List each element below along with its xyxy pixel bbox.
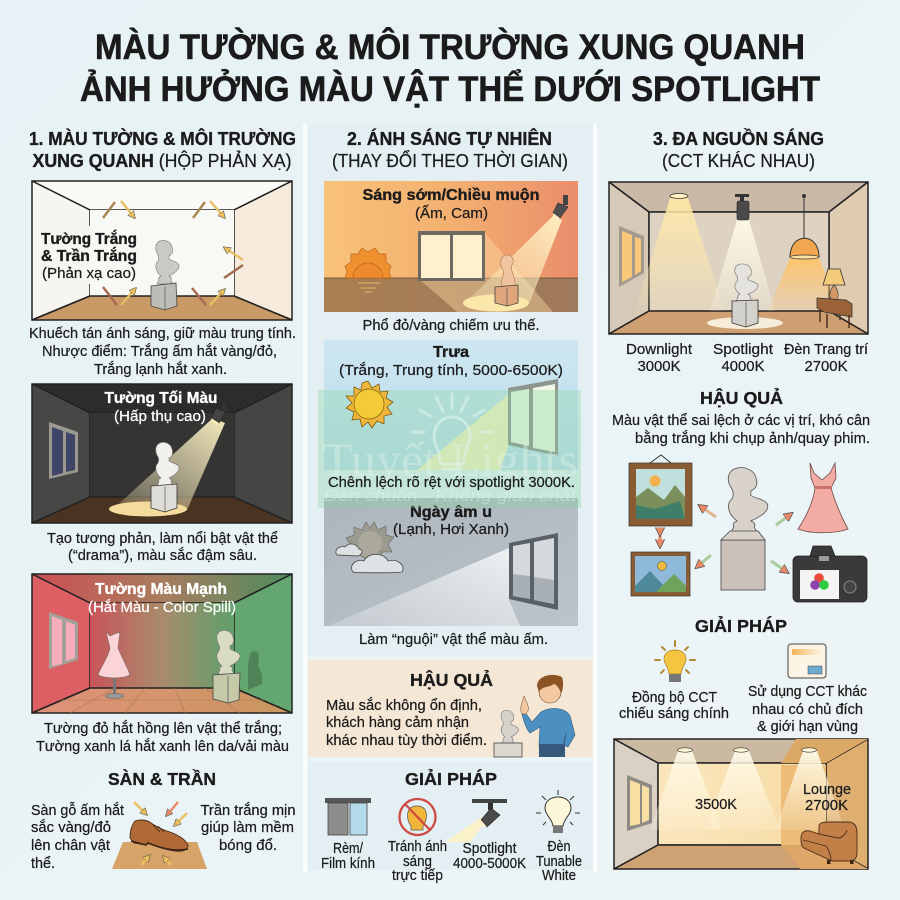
- column divider right: [593, 124, 597, 872]
- scene label: (Ấm, Cam): [415, 205, 488, 222]
- small painting: [631, 552, 690, 596]
- light pool: [707, 317, 783, 329]
- dress on mannequin: [98, 632, 130, 698]
- text: floor: sắc vàng/đỏ: [31, 819, 111, 836]
- title: [80, 27, 820, 109]
- heading: solutions: GIẢI PHÁP: [695, 615, 787, 636]
- camera: [793, 546, 867, 602]
- statue on plinth: [732, 264, 758, 327]
- icon: tunable white bulb: [536, 790, 580, 833]
- heading: column 2: 2. ÁNH SÁNG TỰ NHIÊN: [347, 128, 552, 149]
- zone labels: Lounge: [803, 781, 851, 798]
- labels: sources: Spotlight: [713, 342, 773, 358]
- light pool: [463, 294, 529, 312]
- text block: [326, 697, 487, 749]
- panel: consequences: [308, 660, 593, 757]
- downlights: [650, 748, 845, 830]
- room label: [41, 230, 137, 282]
- scene: dawn and dusk: [324, 181, 578, 312]
- spotlight beam: [466, 216, 562, 302]
- room label: (Phản xạ cao): [42, 266, 136, 282]
- statue on plinth: [151, 442, 179, 512]
- caption: white walls: Trắng lạnh hắt xanh.: [94, 361, 227, 378]
- room: zoned CCT: [614, 739, 868, 869]
- label: no direct light: trực tiếp: [392, 868, 443, 884]
- text: ceiling: bóng đổ.: [219, 838, 277, 854]
- label: spotlight: [453, 841, 526, 872]
- text: consequences: bằng trắng khi chụp ảnh/quay phim.: [635, 430, 870, 447]
- labels: sources: [626, 342, 868, 375]
- window: [418, 231, 485, 281]
- caption: dark walls: Tạo tương phản, làm nổi bật vật thể: [47, 531, 278, 547]
- scene: overcast: [324, 498, 578, 626]
- panel: column 2 natural light: [308, 124, 593, 884]
- icon: warm bulb: [655, 641, 695, 682]
- label: curtain: Rèm/: [333, 841, 364, 857]
- panel: column 1 wall colour: [29, 128, 296, 872]
- panel: solutions: GIẢI PHÁP: [405, 768, 497, 789]
- scene label: (Lạnh, Hơi Xanh): [393, 522, 509, 538]
- floor boards: [60, 688, 265, 713]
- heading: column 3: [653, 128, 824, 171]
- icon: shoe on wood floor: [112, 802, 207, 869]
- spotlight: [735, 194, 749, 220]
- clouds and sun: [336, 522, 403, 573]
- statue on plinth: [495, 255, 518, 306]
- heading: column 1: [29, 128, 296, 171]
- light pool: [109, 502, 187, 516]
- heading: column 3: 3. ĐA NGUỒN SÁNG: [653, 128, 824, 149]
- room label: [104, 390, 218, 425]
- room: strong colour walls: [32, 574, 292, 713]
- window: [619, 226, 644, 287]
- scene: noon: [324, 340, 578, 470]
- labels: sources: 4000K: [722, 359, 765, 375]
- room: mixed CCT: [609, 182, 868, 334]
- title: MÀU TƯỜNG & MÔI TRƯỜNG XUNG QUANH: [95, 27, 805, 67]
- watermark: [318, 390, 581, 508]
- setting sun: [345, 248, 391, 292]
- scene label: Sáng sớm/Chiều muộn: [362, 187, 540, 204]
- text: floor: [31, 802, 124, 872]
- labels: sources: 3000K: [638, 359, 681, 375]
- zone labels: 2700K: [805, 797, 848, 814]
- icon: spotlight: [445, 799, 507, 842]
- scene label: [362, 187, 540, 222]
- icon: control panel: [788, 644, 826, 678]
- room label: & Trần Trắng: [41, 247, 137, 265]
- icon: man pointing: [521, 675, 575, 757]
- label: curtain: Film kính: [321, 856, 375, 872]
- text: floor: thể.: [31, 856, 55, 872]
- caption: colour walls: Tường xanh lá hắt xanh lên da/vải màu: [36, 738, 289, 755]
- heading: column 1: XUNG QUANH (HỘP PHẢN XẠ): [32, 150, 292, 171]
- caption: white walls: Nhược điểm: Trắng ấm hắt vàng/đỏ,: [42, 343, 277, 360]
- label: spotlight: Spotlight: [462, 841, 516, 857]
- heading: column 1: 1. MÀU TƯỜNG & MÔI TRƯỜNG: [29, 128, 296, 149]
- label: tunable white: White: [542, 868, 576, 884]
- spotlight beam: [112, 418, 225, 510]
- caption: noon: Chênh lệch rõ rệt với spotlight 3000K.: [328, 475, 575, 491]
- statue on plinth: [494, 710, 522, 757]
- diagram: colour shift: [629, 455, 867, 602]
- caption: white walls: Khuếch tán ánh sáng, giữ màu trung tính.: [29, 326, 296, 342]
- window: [627, 775, 652, 831]
- zone labels: 3500K: [695, 796, 737, 813]
- watermark: Đèn chuẩn - Không gian chất: [324, 486, 577, 505]
- room label: Tường Tối Màu: [104, 390, 218, 407]
- window: [49, 422, 78, 479]
- icon: no direct light: [400, 799, 436, 835]
- text: consequences: [612, 413, 870, 447]
- label: tunable white: [536, 839, 582, 884]
- heading: consequences: HẬU QUẢ: [700, 387, 783, 408]
- caption: dark walls: [47, 531, 278, 564]
- beams: [635, 198, 725, 311]
- scene label: [393, 504, 509, 538]
- large painting: [629, 455, 692, 526]
- window light: [328, 548, 520, 626]
- spotlight: [211, 402, 227, 425]
- panel: solutions: [308, 762, 593, 884]
- caption: white walls: [29, 326, 296, 378]
- text block: Màu sắc không ổn định,: [326, 697, 482, 714]
- sofa: [801, 822, 857, 864]
- sun: [346, 381, 393, 428]
- spotlight: [553, 195, 568, 219]
- room label: Tường Màu Mạnh: [95, 581, 227, 598]
- text: ceiling: giúp làm mềm: [201, 820, 294, 836]
- label: intentional CCT: [748, 684, 867, 735]
- heading: floor and ceiling: SÀN & TRẦN: [108, 768, 216, 789]
- scene label: Trưa: [433, 344, 469, 361]
- text: floor: Sàn gỗ ấm hắt: [31, 802, 124, 819]
- label: intentional CCT: nhau có chủ đích: [752, 702, 863, 718]
- column divider left: [303, 124, 307, 872]
- label: intentional CCT: Sử dụng CCT khác: [748, 684, 867, 700]
- statue on plinth: [213, 630, 240, 703]
- text: consequences: Màu vật thể sai lệch ở các vị trí, khó cân: [612, 413, 870, 429]
- label: spotlight: 4000-5000K: [453, 856, 526, 872]
- label: sync CCT: chiếu sáng chính: [619, 706, 729, 722]
- heading: column 2: (THAY ĐỔI THEO THỜI GIAN): [332, 150, 568, 171]
- window: [509, 533, 558, 610]
- room: white walls: [32, 181, 292, 320]
- middle column backdrop: [308, 124, 593, 656]
- scene label: Ngày âm u: [410, 504, 492, 521]
- text: ceiling: Trần trắng mịn: [200, 802, 296, 819]
- panel: column 3 multiple light sources: [609, 128, 870, 869]
- text block: khác nhau tùy thời điểm.: [326, 733, 487, 749]
- labels: sources: Đèn Trang trí: [784, 342, 868, 358]
- icon: curtain and film: [325, 798, 371, 835]
- room label: (Hấp thụ cao): [114, 409, 206, 425]
- warm lounge zone: [781, 765, 826, 845]
- heading: column 2: [332, 128, 568, 171]
- labels: sources: Downlight: [626, 342, 692, 358]
- caption: overcast: Làm “nguội” vật thể màu ấm.: [359, 632, 548, 648]
- room label: Tường Trắng: [41, 230, 137, 248]
- label: intentional CCT: & giới hạn vùng: [757, 719, 858, 735]
- text: ceiling: [200, 802, 296, 854]
- title: ẢNH HƯỞNG MÀU VẬT THỂ DƯỚI SPOTLIGHT: [80, 69, 820, 109]
- caption: dark walls: (“drama”), màu sắc đậm sâu.: [68, 547, 257, 564]
- label: no direct light: [388, 839, 447, 884]
- label: curtain: [321, 841, 375, 872]
- room label: [88, 581, 236, 616]
- text: floor: lên chân vật: [31, 838, 110, 854]
- label: tunable white: Đèn: [548, 839, 570, 855]
- pendant lamp: [790, 194, 819, 259]
- label: tunable white: Tunable: [536, 854, 582, 870]
- table lamp: [817, 269, 852, 328]
- label: sync CCT: [619, 690, 729, 722]
- window light: [417, 393, 510, 470]
- bust and plinth: [721, 468, 768, 590]
- reflection arrows: [103, 201, 243, 305]
- caption: colour walls: [36, 720, 289, 755]
- labels: sources: 2700K: [804, 359, 848, 375]
- room label: (Hắt Màu - Color Spill): [88, 599, 236, 616]
- text block: khách hàng cảm nhận: [326, 715, 469, 731]
- zone labels: [695, 781, 851, 814]
- scene label: [339, 344, 563, 379]
- arrows: [660, 506, 791, 572]
- label: sync CCT: Đồng bộ CCT: [632, 690, 717, 706]
- label: no direct light: sáng: [403, 854, 432, 870]
- room: dark walls: [32, 384, 292, 523]
- dress: [798, 463, 848, 533]
- caption: dawn: Phổ đỏ/vàng chiếm ưu thế.: [362, 318, 540, 334]
- arrows to shoe: [134, 802, 187, 865]
- panel: consequences: HẬU QUẢ: [410, 669, 493, 690]
- wall shadow of statue: [248, 651, 262, 690]
- label: no direct light: Tránh ánh: [388, 839, 447, 855]
- window light: [420, 233, 553, 312]
- scene label: (Trắng, Trung tính, 5000-6500K): [339, 362, 563, 379]
- heading: column 3: (CCT KHÁC NHAU): [662, 150, 815, 171]
- window: [508, 379, 558, 456]
- downlight: [670, 194, 688, 198]
- caption: colour walls: Tường đỏ hắt hồng lên vật thể trắng;: [44, 720, 282, 737]
- pink window: [49, 612, 78, 669]
- watermark: Tuyết Lights: [322, 434, 578, 487]
- statue on plinth: [151, 240, 179, 310]
